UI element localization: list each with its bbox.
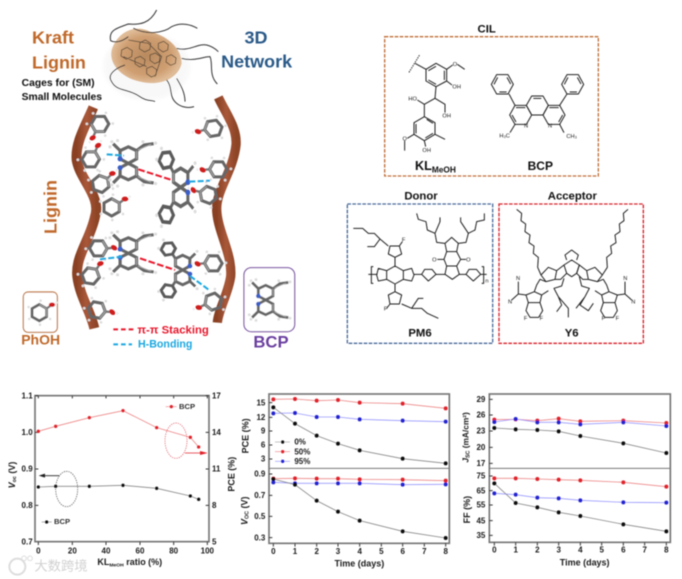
- axis title: Jsc: (mA/cm: [461, 418, 471, 451]
- inset: BCP: [244, 268, 295, 351]
- axis title: time: Time (days): [334, 559, 384, 569]
- structure: Y6: N: [631, 299, 635, 305]
- series: FF curves: [492, 476, 668, 533]
- callout: black ellipse and arrow: [39, 471, 78, 507]
- x axis labels: 7: [642, 546, 647, 555]
- axis title: Jsc: SC: [466, 450, 472, 458]
- series: BCP PCE: [37, 409, 200, 449]
- left axis labels: 0.7: [22, 537, 33, 546]
- x axis labels: 100: [201, 546, 215, 555]
- watermark: 大数跨境: [34, 559, 88, 574]
- legend: black BCP: BCP: [54, 517, 70, 526]
- structure: PM6: n: [485, 279, 488, 285]
- axis title: Voc: OC: [244, 511, 250, 519]
- label: KL MeOH: KL: [415, 159, 432, 173]
- x axis labels: 6: [621, 546, 626, 555]
- label: Y6: Y6: [565, 328, 579, 340]
- x axis labels: 6: [400, 547, 405, 556]
- text: cages for small molecules: Small Molecules: [22, 92, 102, 103]
- legend: interactions: H-Bonding: [138, 338, 192, 350]
- heading: Lignin vertical: Lignin: [41, 180, 61, 234]
- y axis labels: Jsc: 20: [476, 443, 486, 452]
- label: PM6: PM6: [408, 328, 432, 340]
- axis title: Voc: (V): [7, 462, 17, 476]
- image: lignin powder with polymer strands: [103, 10, 218, 107]
- y axis labels: FF: 65: [476, 486, 486, 495]
- structure: KL MeOH: O: [453, 62, 458, 68]
- y axis labels: Voc: 0.9: [254, 470, 266, 479]
- heading: Donor: Donor: [404, 190, 438, 202]
- axis title: Jsc: ): [461, 412, 471, 415]
- structure: PM6: [353, 213, 488, 318]
- structure: BCP: N: [548, 124, 552, 130]
- axis title: KL ratio: KL: [97, 557, 109, 567]
- structure: Y6: N: [508, 299, 512, 305]
- axis title: Voc: V: [7, 481, 17, 488]
- series: Jsc curves: [492, 417, 668, 455]
- axis title: Jsc: J: [461, 458, 471, 463]
- y axis labels: FF: 45: [476, 516, 486, 525]
- watermark: [9, 556, 88, 575]
- structure: Y6: [508, 209, 635, 322]
- structure: KL MeOH: OH: [442, 114, 451, 120]
- dashed frame: [499, 204, 643, 343]
- legend: 0 50 95 percent: 95%: [294, 457, 310, 466]
- legend: interactions: π-π Stacking: [137, 324, 209, 336]
- panel: Donor: [347, 190, 493, 343]
- y axis labels: FF: 35: [476, 531, 486, 540]
- inset: BCP: BCP: [253, 332, 289, 351]
- axis title: time: Time (days): [560, 558, 610, 568]
- right axis labels: 17: [212, 391, 221, 400]
- legend: 0 50 95 percent: 0%: [294, 438, 306, 447]
- x axis labels: 1: [293, 547, 298, 556]
- axis title: Voc: (V): [239, 497, 249, 511]
- panel: CIL: [385, 24, 598, 176]
- series: BCP Voc: [37, 484, 200, 501]
- right axis labels: [212, 391, 221, 546]
- callout: red ellipse and arrow: [165, 423, 208, 458]
- structure: Y6: N: [516, 276, 520, 282]
- structure: Y6: F: [540, 316, 544, 322]
- y axis labels: PCE: 3: [261, 455, 266, 464]
- y axis labels: Jsc: 17: [476, 459, 486, 468]
- y axis labels: Jsc: [476, 395, 486, 468]
- axis title: KL ratio: ratio (%): [124, 557, 162, 567]
- y axis labels: PCE: 15: [256, 398, 266, 407]
- structure: Y6: F: [616, 316, 620, 322]
- structure: KL MeOH: O: [402, 137, 407, 143]
- molecules: BCP stacks: [108, 139, 199, 301]
- left axis labels: 1.1: [22, 392, 33, 401]
- left axis labels: 0.9: [22, 465, 33, 474]
- y axis labels: FF: [476, 472, 486, 540]
- x axis labels: 4: [357, 547, 362, 556]
- axis title: FF: FF (%): [462, 496, 472, 523]
- structure: KL MeOH: HO: [408, 96, 418, 102]
- axis title: Jsc: 2: [462, 415, 468, 418]
- x axis labels: 4: [578, 546, 583, 555]
- left axis labels: 1.0: [22, 428, 33, 437]
- x axis labels: 0: [36, 546, 41, 555]
- structure: PM6: O: [432, 257, 437, 263]
- y axis labels: Voc: [254, 470, 266, 542]
- x axis labels: 80: [169, 546, 179, 555]
- structure: Y6: F: [524, 316, 528, 322]
- y axis labels: PCE: 6: [261, 441, 266, 450]
- y axis labels: PCE: [256, 398, 266, 464]
- structure: BCP: N: [524, 124, 528, 130]
- structure: PM6: O: [466, 257, 471, 263]
- structure: PM6: F: [384, 307, 388, 313]
- x axis labels: [271, 547, 448, 556]
- structure: Y6: F: [602, 316, 606, 322]
- label: BCP: BCP: [528, 159, 553, 173]
- x axis labels: 20: [68, 546, 77, 555]
- heading: 3D Network: 3D: [244, 27, 267, 47]
- chart: PCE and Voc stability: [239, 394, 449, 569]
- legend: 0 50 95 percent: [275, 438, 310, 466]
- heading: Acceptor: Acceptor: [548, 190, 597, 202]
- legend: red BCP: BCP: [179, 402, 195, 411]
- heading: 3D Network: Network: [221, 52, 293, 72]
- y axis labels: Jsc: 29: [476, 395, 486, 404]
- molecules: phenol units: [73, 106, 236, 333]
- right axis labels: 5: [212, 537, 217, 546]
- structure: KL MeOH: OH: [452, 85, 461, 91]
- x axis labels: 2: [314, 547, 319, 556]
- axis title: PCE: PCE (%): [241, 418, 251, 453]
- interaction lines: red pi stacking: [138, 169, 175, 270]
- x axis labels: 5: [599, 546, 604, 555]
- inset: PhOH: PhOH: [21, 331, 60, 347]
- structure: KL MeOH: [402, 54, 465, 154]
- legend: 0 50 95 percent: 50%: [294, 447, 310, 456]
- left axis labels: [22, 392, 33, 546]
- y axis labels: FF: 75: [476, 472, 486, 481]
- axis title: PCE: PCE (%): [226, 457, 236, 492]
- x axis labels: 7: [422, 547, 427, 556]
- legend: red BCP: [166, 402, 195, 411]
- label: KL MeOH: MeOH: [432, 165, 456, 175]
- series: PCE curves: [271, 397, 448, 465]
- left axis labels: 0.8: [22, 501, 33, 510]
- series: Voc curves: [271, 476, 448, 540]
- x axis labels: 0: [492, 546, 497, 555]
- right axis labels: 11: [212, 465, 221, 474]
- structure: BCP: [491, 75, 584, 140]
- axis title: Voc: V: [239, 518, 249, 525]
- right axis labels: 8: [212, 501, 217, 510]
- axis title: KL ratio: MeOH: [109, 562, 124, 568]
- x axis labels: [36, 546, 215, 555]
- x axis labels: 60: [136, 546, 145, 555]
- x axis labels: 0: [271, 547, 276, 556]
- y axis labels: Voc: 0.5: [254, 512, 266, 521]
- panel: Acceptor: [499, 190, 643, 343]
- dashed frame: [385, 37, 598, 176]
- legend: black BCP: [42, 517, 70, 526]
- x axis labels: [492, 546, 669, 555]
- x axis labels: 3: [336, 547, 341, 556]
- heading: Kraft Lignin: Kraft: [32, 27, 74, 47]
- y axis labels: PCE: 9: [261, 427, 266, 436]
- text: cages for small molecules: Cages for (SM): [22, 78, 95, 89]
- structure: BCP: H₃C: [499, 133, 510, 139]
- axis title: Voc: oc: [12, 476, 18, 482]
- x axis labels: 3: [556, 546, 561, 555]
- heading: Kraft Lignin: Lignin: [32, 52, 86, 72]
- y axis labels: FF: 55: [476, 501, 486, 510]
- x axis labels: 1: [513, 546, 518, 555]
- structure: Y6: N: [623, 276, 627, 282]
- structure: PM6: F: [402, 237, 406, 243]
- y axis labels: PCE: 12: [256, 413, 266, 422]
- x axis labels: 8: [664, 546, 669, 555]
- right axis labels: 14: [212, 428, 221, 437]
- y axis labels: Jsc: 26: [476, 411, 486, 420]
- dashed frame: [347, 204, 493, 343]
- x axis labels: 5: [379, 547, 384, 556]
- chart: Voc and PCE vs KL ratio: [7, 391, 236, 575]
- interaction lines: blue hydrogen bonding: [100, 154, 210, 291]
- x axis labels: 2: [535, 546, 540, 555]
- lignin strand: left: [76, 107, 96, 328]
- inset: PhOH: [21, 292, 60, 347]
- structure: BCP: CH₃: [566, 134, 577, 140]
- x axis labels: 40: [102, 546, 111, 555]
- legend: interactions: [113, 324, 209, 350]
- lignin strand: right: [217, 97, 236, 323]
- schematic: kraft lignin 3D network: [21, 10, 295, 351]
- y axis labels: Voc: 0.3: [254, 533, 266, 542]
- chart: Jsc and FF stability: [461, 394, 670, 568]
- structure: KL MeOH: OH: [422, 148, 431, 154]
- y axis labels: Voc: 0.7: [254, 491, 266, 500]
- y axis labels: Jsc: 23: [476, 427, 486, 436]
- heading: CIL: CIL: [478, 24, 496, 36]
- x axis labels: 8: [443, 547, 448, 556]
